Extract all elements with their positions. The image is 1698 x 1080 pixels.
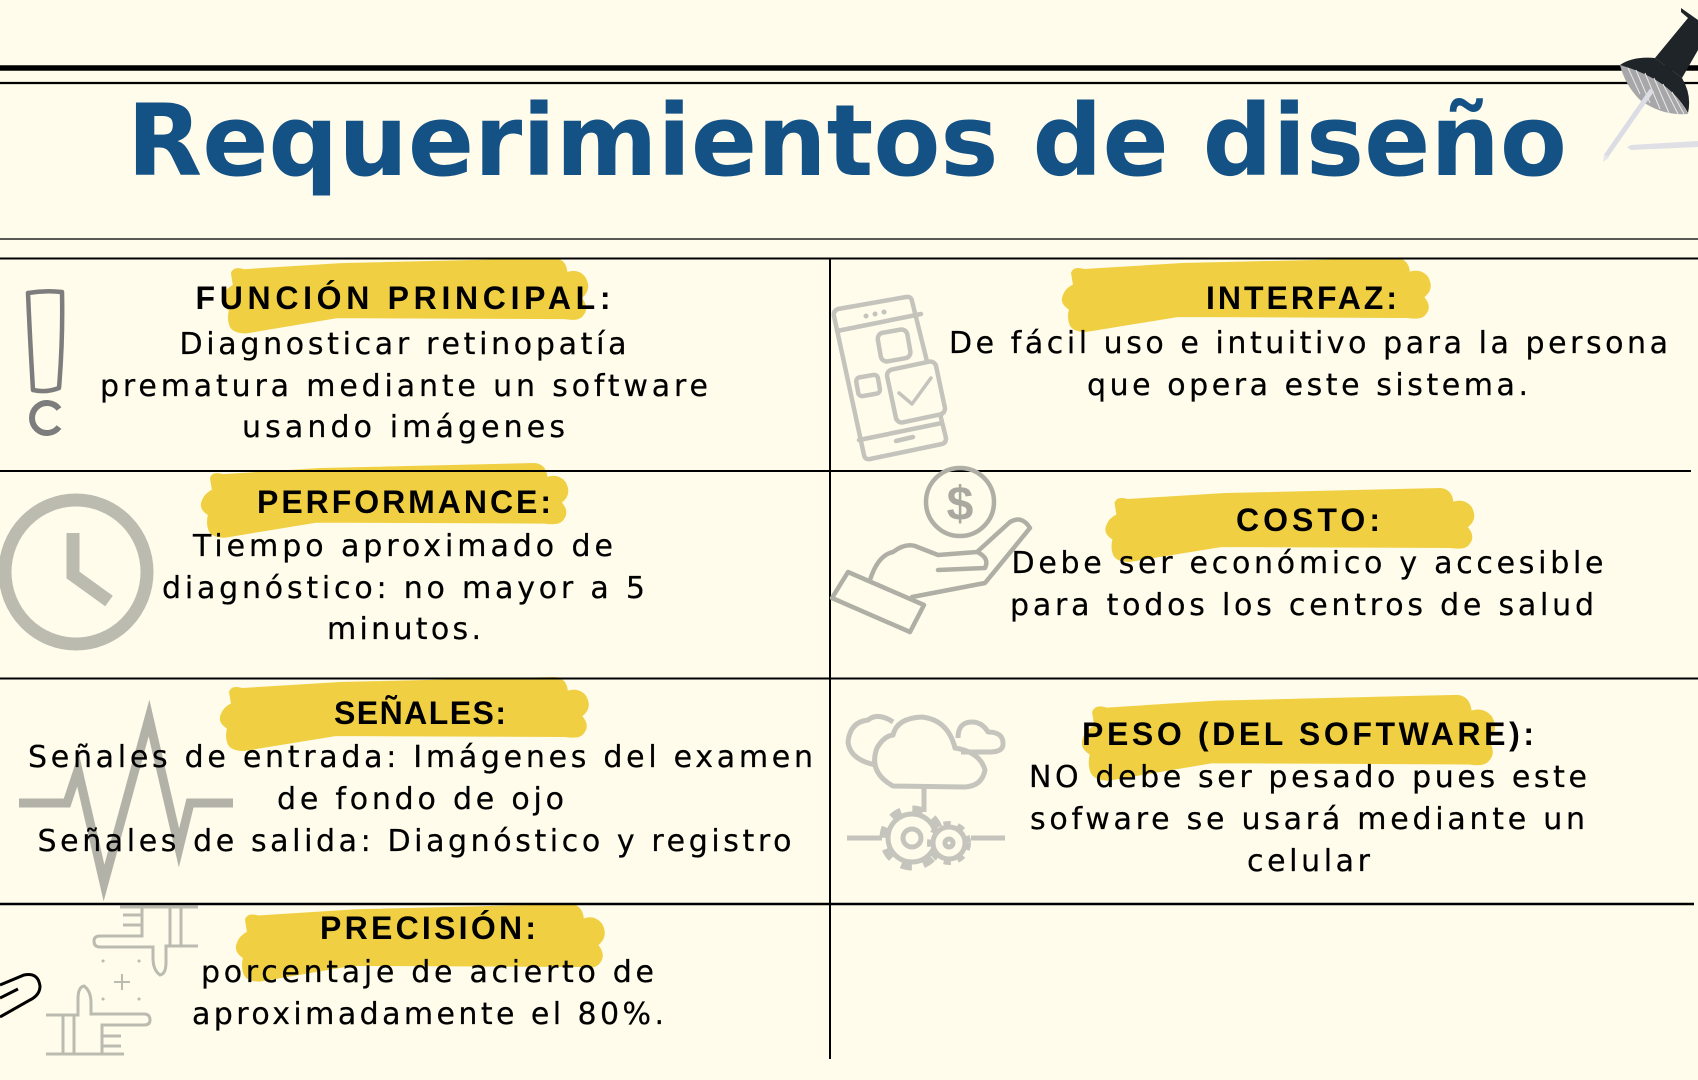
heading: PERFORMANCE: xyxy=(257,484,551,520)
icon: exclamation mark xyxy=(28,291,62,433)
text block xyxy=(162,529,645,647)
panel: precisión xyxy=(0,905,664,1054)
highlight xyxy=(221,678,588,750)
text block: sofware se usará mediante un xyxy=(1030,802,1585,837)
highlight xyxy=(237,905,604,981)
heading: PESO (DEL SOFTWARE): xyxy=(1082,716,1534,752)
panel: costo xyxy=(832,468,1604,632)
text block: porcentaje de acierto de xyxy=(201,955,654,990)
heading: FUNCIÓN PRINCIPAL: xyxy=(196,280,610,316)
highlight xyxy=(1063,259,1430,331)
text block: Tiempo aproximado de xyxy=(192,529,613,564)
text block xyxy=(28,740,813,859)
text block: diagnóstico: no mayor a 5 xyxy=(162,571,645,606)
icon: hand with coin xyxy=(832,468,1030,632)
icon: cloud and gears xyxy=(847,716,1005,867)
text block: aproximadamente el 80%. xyxy=(192,997,664,1032)
highlight xyxy=(202,464,567,537)
text block: de fondo de ojo xyxy=(277,782,564,817)
icon: phone xyxy=(834,297,946,459)
panel: interfaz xyxy=(834,259,1668,459)
heading: INTERFAZ: xyxy=(1206,280,1397,316)
panel: función principal xyxy=(28,259,708,445)
icon: push pin xyxy=(1603,8,1698,162)
text block: para todos los centros de salud xyxy=(1010,588,1594,623)
heading: PRECISIÓN: xyxy=(320,910,536,946)
icon: clock xyxy=(5,500,147,644)
text block: celular xyxy=(1247,844,1371,879)
text block: Debe ser económico y accesible xyxy=(1012,546,1604,581)
text block: que opera este sistema. xyxy=(1087,368,1528,403)
icon: hand with coin: $ xyxy=(947,478,974,531)
text block: Diagnosticar retinopatía xyxy=(180,327,626,362)
icon: paperclip xyxy=(0,974,40,1017)
text block: Señales de salida: Diagnóstico y registro xyxy=(38,824,791,859)
panel: peso del software xyxy=(847,696,1587,879)
heading: COSTO: xyxy=(1236,502,1380,538)
text block xyxy=(192,955,664,1032)
text block: De fácil uso e intuitivo para la persona xyxy=(949,326,1668,361)
text block xyxy=(100,327,708,445)
icon: pulse line xyxy=(19,718,233,883)
text block xyxy=(1010,546,1604,623)
text block: NO debe ser pesado pues este xyxy=(1029,760,1587,795)
highlight xyxy=(1083,696,1494,780)
text block: usando imágenes xyxy=(242,410,565,445)
title: Requerimientos de diseño xyxy=(127,84,1567,199)
panel: señales xyxy=(19,678,813,883)
highlight xyxy=(223,259,587,332)
panel: performance xyxy=(5,464,645,647)
text block xyxy=(1029,760,1587,879)
text block: Señales de entrada: Imágenes del examen xyxy=(28,740,813,775)
highlight xyxy=(1106,489,1473,561)
text block: minutos. xyxy=(327,612,481,647)
heading: SEÑALES: xyxy=(334,695,506,731)
text block: prematura mediante un software xyxy=(100,369,708,404)
icon: framing hands xyxy=(46,907,198,1054)
text block xyxy=(949,326,1668,403)
